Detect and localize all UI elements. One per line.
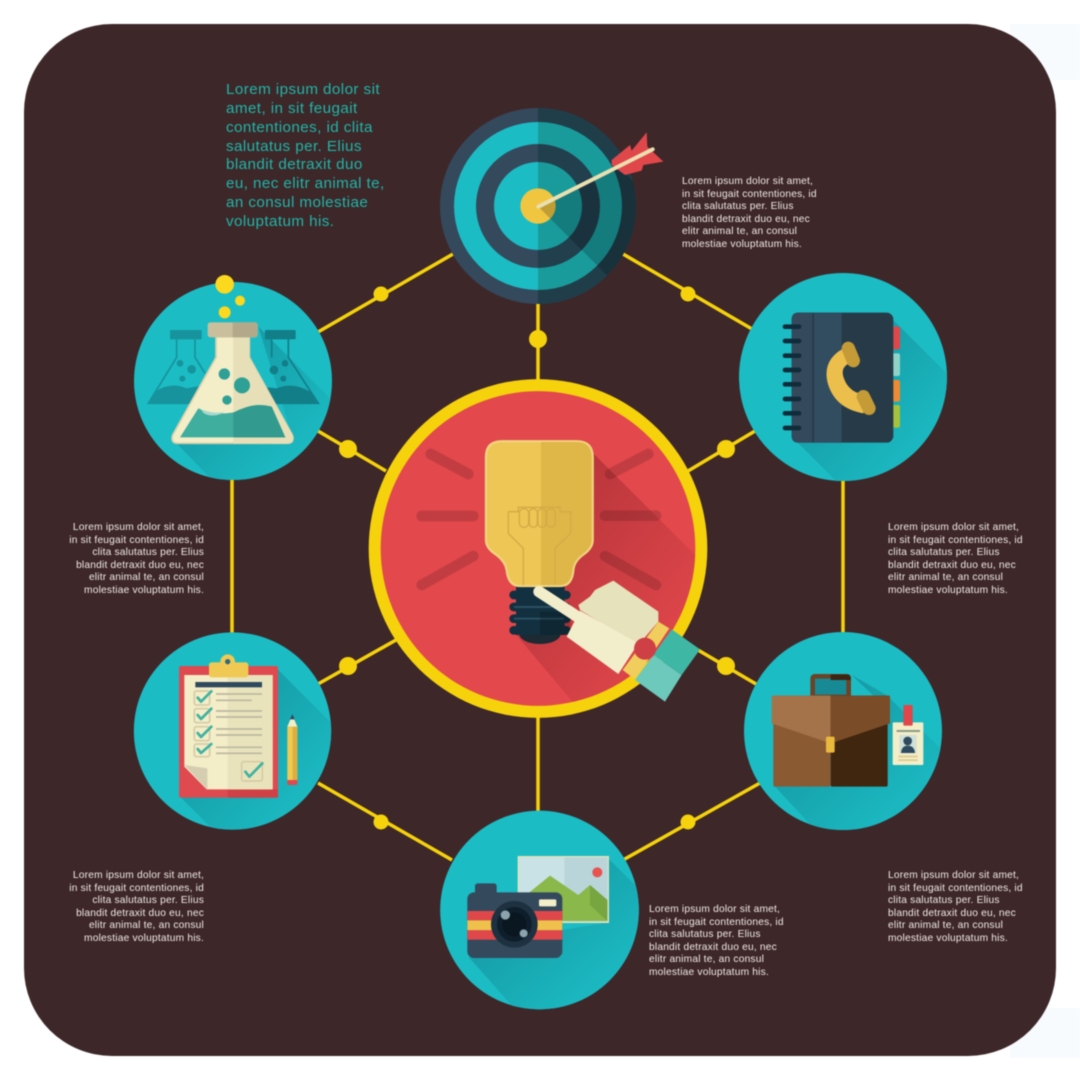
heading paragraph: Lorem ipsum dolor sit <box>226 81 380 98</box>
address book icon <box>739 273 952 487</box>
arrow <box>538 132 663 207</box>
pointing hand <box>539 581 700 702</box>
heading paragraph <box>226 81 385 230</box>
handle <box>813 674 851 697</box>
text block: target: clita salutatus per. Elius <box>682 201 794 212</box>
text block: clipboard: clita salutatus per. Elius <box>92 895 204 906</box>
text block: clipboard: blandit detraxit duo eu, nec <box>76 908 204 919</box>
heading paragraph: voluptatum his. <box>226 213 334 230</box>
id badge <box>893 705 923 765</box>
text block: camera <box>649 904 784 978</box>
heading paragraph: contentiones, id clita <box>226 119 373 136</box>
faint corner tint bottom right <box>1010 1008 1080 1058</box>
flask icon <box>134 275 337 483</box>
camera icon <box>440 811 648 1015</box>
text block: clipboard: molestiae voluptatum his. <box>84 933 204 944</box>
text block: address book: clita salutatus per. Elius <box>888 547 1000 558</box>
text block: address book <box>888 522 1023 596</box>
text block: address book: elitr animal te, an consul <box>888 572 1003 583</box>
paper <box>184 675 273 789</box>
bulb base <box>509 585 571 644</box>
text block: flask: in sit feugait contentiones, id <box>69 535 204 546</box>
main flask <box>172 322 293 443</box>
text block: flask <box>69 522 204 596</box>
text block: flask: elitr animal te, an consul <box>89 572 204 583</box>
text block: camera: blandit detraxit duo eu, nec <box>649 942 777 953</box>
text block: briefcase: molestiae voluptatum his. <box>888 933 1008 944</box>
board <box>179 666 278 798</box>
text block: address book: blandit detraxit duo eu, nec <box>888 560 1016 571</box>
camera body <box>467 883 562 958</box>
text block: target: blandit detraxit duo eu, nec <box>682 214 810 225</box>
text block: flask: Lorem ipsum dolor sit amet, <box>73 522 204 533</box>
text block: briefcase: Lorem ipsum dolor sit amet, <box>888 870 1019 881</box>
pencil <box>287 714 297 785</box>
case body <box>772 696 890 787</box>
text block: clipboard <box>69 870 204 944</box>
background flasks <box>148 330 318 403</box>
text block: clipboard: elitr animal te, an consul <box>89 920 204 931</box>
bulb glass <box>486 441 593 586</box>
heading paragraph: eu, nec elitr animal te, <box>226 175 385 192</box>
text block: target: elitr animal te, an consul <box>682 226 797 237</box>
briefcase icon <box>744 632 953 835</box>
text block: target <box>682 176 817 250</box>
heading paragraph: amet, in sit feugait <box>226 100 358 117</box>
text block: briefcase: in sit feugait contentiones, id <box>888 883 1023 894</box>
book <box>785 313 893 443</box>
central light bulb circle <box>369 379 707 718</box>
picture <box>518 857 608 922</box>
text block: briefcase: clita salutatus per. Elius <box>888 895 1000 906</box>
target icon <box>440 108 664 305</box>
text block: target: molestiae voluptatum his. <box>682 239 802 250</box>
text block: briefcase <box>888 870 1023 944</box>
text block: briefcase: elitr animal te, an consul <box>888 920 1003 931</box>
text block: camera: in sit feugait contentiones, id <box>649 917 784 928</box>
yellow bubbles <box>215 275 245 318</box>
text block: flask: molestiae voluptatum his. <box>84 585 204 596</box>
text block: address book: molestiae voluptatum his. <box>888 585 1008 596</box>
text block: flask: blandit detraxit duo eu, nec <box>76 560 204 571</box>
text block: camera: elitr animal te, an consul <box>649 954 764 965</box>
text block: address book: in sit feugait contentiones, id <box>888 535 1023 546</box>
phone handset <box>826 347 869 413</box>
faint corner tint top right <box>1010 24 1080 80</box>
connector network <box>232 254 843 860</box>
text block: address book: Lorem ipsum dolor sit amet, <box>888 522 1019 533</box>
text block: target: Lorem ipsum dolor sit amet, <box>682 176 813 187</box>
text block: camera: molestiae voluptatum his. <box>649 967 769 978</box>
text block: camera: clita salutatus per. Elius <box>649 929 761 940</box>
text block: briefcase: blandit detraxit duo eu, nec <box>888 908 1016 919</box>
clipboard icon <box>134 632 337 837</box>
heading paragraph: salutatus per. Elius <box>226 138 362 155</box>
text block: clipboard: in sit feugait contentiones, id <box>69 883 204 894</box>
text block: clipboard: Lorem ipsum dolor sit amet, <box>73 870 204 881</box>
text block: target: in sit feugait contentiones, id <box>682 189 817 200</box>
heading paragraph: an consul molestiae <box>226 194 368 211</box>
tabs <box>892 327 900 428</box>
clip <box>209 654 248 677</box>
text block: flask: clita salutatus per. Elius <box>92 547 204 558</box>
text block: camera: Lorem ipsum dolor sit amet, <box>649 904 780 915</box>
heading paragraph: blandit detraxit duo <box>226 156 363 173</box>
